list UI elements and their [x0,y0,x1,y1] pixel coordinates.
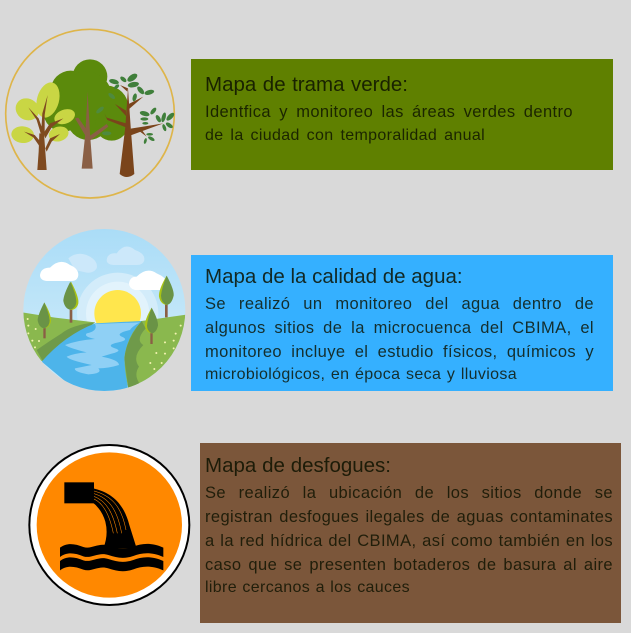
icon: sewage discharge [28,444,190,606]
text block: calidad de agua [205,295,594,383]
text block: trama verde [205,103,573,144]
heading: desfogues: Mapa de desfogues: [205,454,391,477]
icon: trees in gold ring [4,28,176,199]
text block: calidad de agua: algunos sitios de la microcuenca del CBIMA, el [205,319,594,337]
text block: desfogues: registran desfogues ilegales de aguas contaminates [205,508,613,526]
text block: desfogues: caso que se presenten botaderos de basura al aire [205,556,613,574]
text block: desfogues [205,484,613,596]
text block: desfogues: libre cercanos a los cauces [205,579,410,596]
text block: calidad de agua: Se realizó un monitoreo del agua dentro de [205,295,594,313]
text block: trama verde: Identfica y monitoreo las áreas verdes dentro [205,103,573,121]
heading: calidad de agua: Mapa de la calidad de agua: [205,265,463,288]
icon: river landscape [23,229,186,391]
text block: trama verde: de la ciudad con temporalidad anual [205,127,485,144]
text block: calidad de agua: microbiológicos, en época seca y lluviosa [205,366,517,383]
panel: mapa de desfogues [200,443,621,623]
text block: desfogues: a la red hídrica del CBIMA, así como también en los [205,532,613,550]
panel: mapa de la calidad de agua [191,255,613,391]
panel: mapa de trama verde [191,59,613,170]
text block: calidad de agua: monitoreo incluye el estudio físicos, químicos y [205,343,594,361]
heading: trama verde: Mapa de trama verde: [205,73,408,96]
text block: desfogues: Se realizó la ubicación de los sitios donde se [205,484,613,502]
